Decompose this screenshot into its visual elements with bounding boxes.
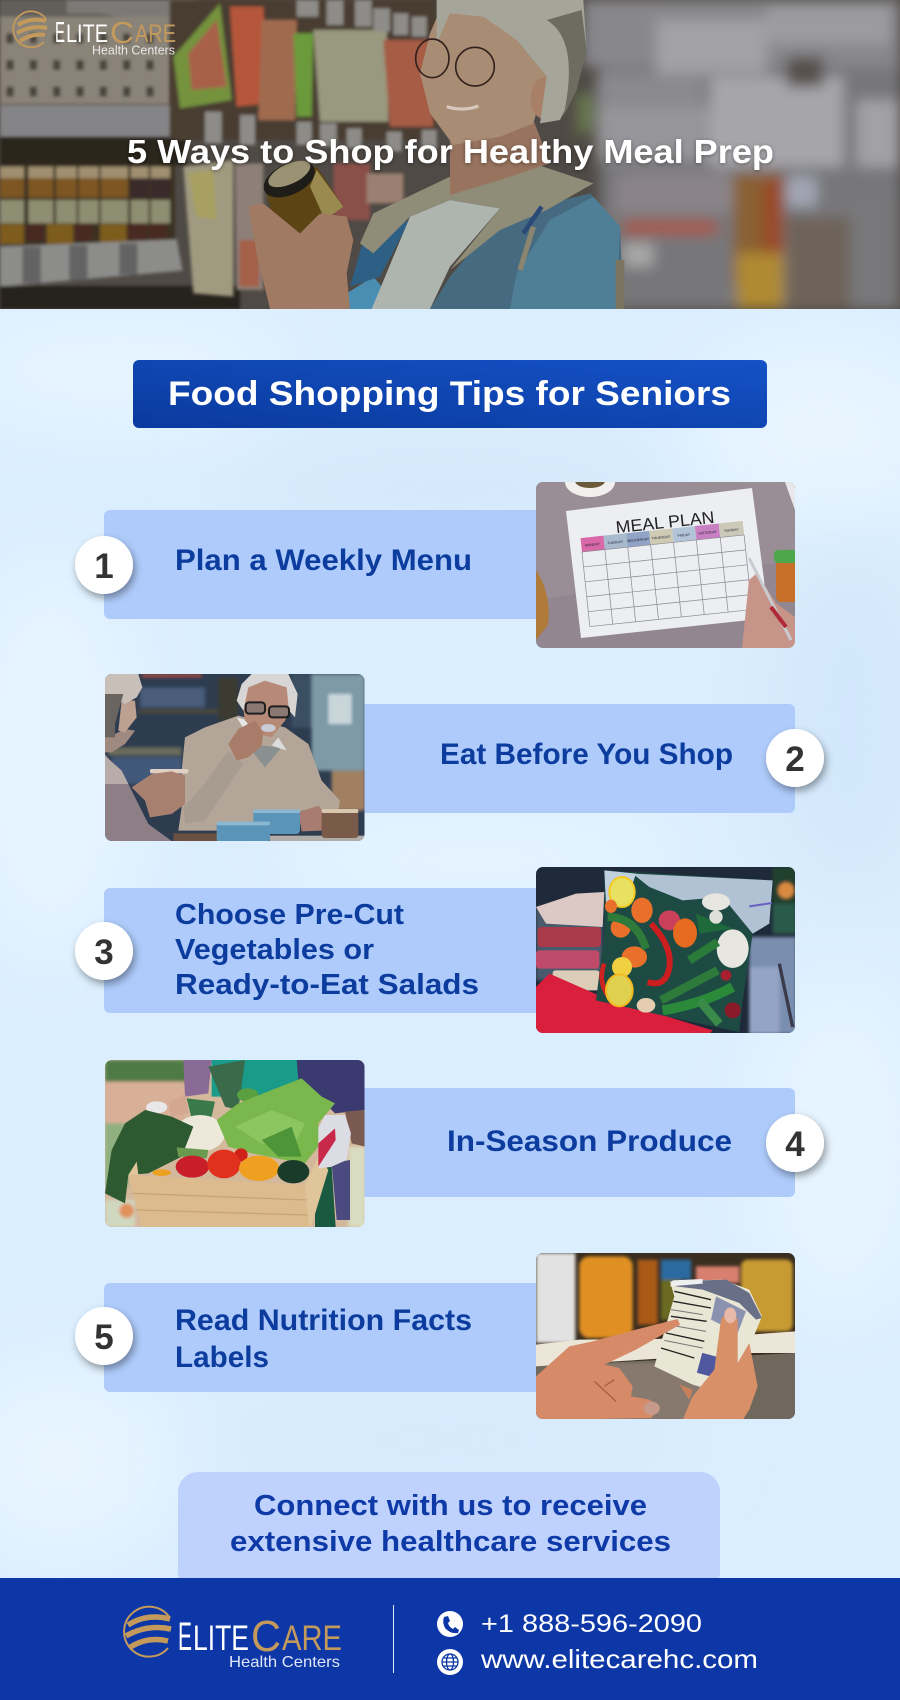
bar: [350, 1088, 795, 1197]
photo: meal plan: TUESDAY: [607, 540, 624, 545]
number badge: [75, 1307, 133, 1365]
shirt: [372, 200, 500, 309]
bar: [350, 704, 795, 813]
tip text: Eat Before You Shop: [440, 738, 733, 771]
cup: [654, 1280, 762, 1388]
number badge: [766, 729, 824, 787]
photo: meal plan: SUNDAY: [724, 527, 740, 533]
hands: [536, 1319, 680, 1420]
man: [178, 716, 340, 831]
number badge: [75, 536, 133, 594]
logo wordmark: Health Centers: [92, 42, 175, 58]
logo wordmark: E: [55, 17, 65, 49]
number badge: 3: [94, 933, 114, 972]
tip text: Vegetables or: [175, 934, 374, 966]
footer logo: [124, 1607, 342, 1671]
hair: [437, 0, 587, 123]
left shelves: [0, 0, 240, 309]
tip text: Ready-to-Eat Salads: [175, 969, 479, 1001]
tip text: [175, 899, 479, 1001]
middle packages: [170, 0, 437, 297]
photo: meal plan: SATURDAY: [698, 530, 718, 536]
footer logo: C: [251, 1612, 281, 1661]
photo: meal plan: MEAL PLAN: [615, 508, 715, 537]
phone number: +1 888-596-2090: [481, 1610, 702, 1638]
neck: [450, 120, 550, 195]
icon: phone: [437, 1611, 463, 1637]
heading banner: Food Shopping Tips for Seniors: [168, 375, 731, 413]
call to action: [178, 1472, 720, 1592]
table and cups: [173, 833, 220, 841]
photo: reading a label: [536, 1253, 796, 1420]
number badge: 1: [94, 547, 114, 586]
photo: meal plan: [536, 482, 795, 648]
icon: globe: [437, 1649, 463, 1675]
title: 5 Ways to Shop for Healthy Meal Prep: [127, 133, 774, 170]
tip 1: plan a weekly menu: [75, 467, 800, 648]
photo: meal plan: WEDNESDAY: [627, 537, 650, 543]
photo: senior eating: [105, 674, 365, 842]
bar: [104, 1283, 554, 1392]
tip text: Plan a Weekly Menu: [175, 544, 472, 577]
footer: [0, 1578, 900, 1700]
number badge: [766, 1114, 824, 1172]
tip 3: pre-cut vegetables: [75, 867, 796, 1034]
logo wordmark: [55, 15, 176, 58]
tip text: Read Nutrition Facts: [175, 1304, 472, 1337]
number badge: [75, 922, 133, 980]
tip 4: in-season produce: [105, 1060, 824, 1227]
heading banner: [133, 360, 767, 428]
collar: [360, 163, 593, 270]
footer logo: ARE: [282, 1619, 342, 1658]
photo: vegetable crate: [105, 1060, 365, 1227]
hero photo: senior woman shopping: [0, 0, 900, 309]
tip 5: nutrition labels: [75, 1253, 796, 1420]
photo: bagged vegetables: [536, 867, 796, 1034]
website: www.elitecarehc.com: [480, 1644, 758, 1674]
bar: [104, 510, 554, 619]
photo: meal plan: MONDAY: [585, 542, 601, 548]
logo wordmark: C: [110, 15, 134, 50]
hand and jar: [267, 167, 343, 233]
jacket: [430, 193, 623, 309]
face: [420, 7, 547, 145]
tip 2: eat before you shop: [105, 674, 824, 842]
tip text: Labels: [175, 1341, 269, 1374]
tip text: In-Season Produce: [447, 1125, 732, 1158]
call to action: extensive healthcare services: [230, 1526, 671, 1558]
call to action: Connect with us to receive: [254, 1490, 647, 1522]
logo emblem: [13, 11, 47, 47]
footer logo: E: [178, 1615, 192, 1659]
bar: [104, 888, 554, 1013]
number badge: 5: [94, 1318, 114, 1357]
tip text: Choose Pre-Cut: [175, 899, 404, 931]
woman: [105, 754, 172, 841]
header logo: [13, 11, 176, 58]
bag: [596, 870, 773, 1032]
tip text: [175, 1304, 472, 1374]
logo wordmark: ARE: [135, 20, 176, 48]
photo: meal plan: THURSDAY: [651, 535, 671, 541]
footer logo: LITE: [193, 1619, 249, 1658]
logo wordmark: LITE: [66, 20, 108, 48]
right blurred shelves: [577, 0, 900, 309]
footer logo: Health Centers: [229, 1654, 340, 1671]
glasses: [416, 39, 449, 78]
photo: meal plan: FRIDAY: [677, 533, 691, 538]
number badge: 2: [785, 740, 805, 779]
number badge: 4: [785, 1125, 805, 1164]
